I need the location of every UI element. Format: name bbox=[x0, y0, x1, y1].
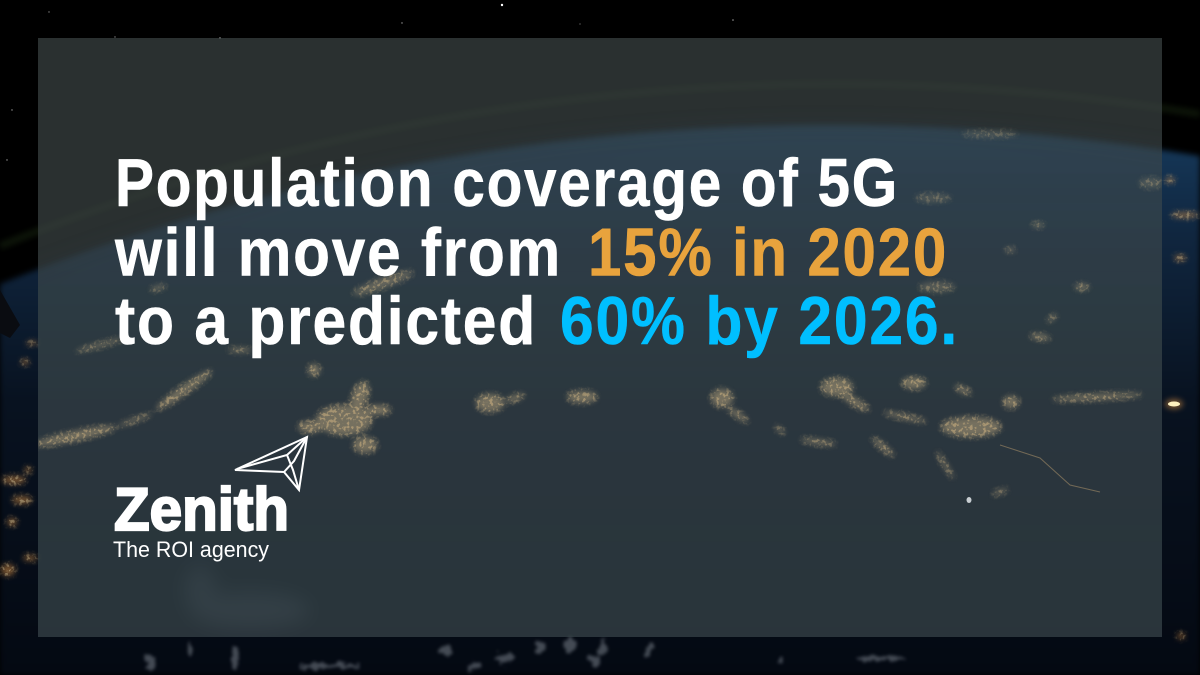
highlight: 15% in 2020: 15% in 2020 bbox=[588, 214, 948, 290]
line 2: will move from bbox=[114, 214, 562, 290]
tagline: The ROI agency bbox=[113, 537, 269, 562]
line 3: to a predicted bbox=[115, 283, 537, 359]
bright city at right edge bbox=[1165, 399, 1183, 409]
line 1: Population coverage of 5G bbox=[115, 145, 899, 221]
icon: paper plane bbox=[235, 437, 307, 490]
heading bbox=[114, 145, 959, 359]
city lights and clouds inside the panel bbox=[33, 131, 1163, 628]
highlight: 60% by 2026: 60% by 2026. bbox=[560, 283, 959, 359]
wordmark: Zenith bbox=[114, 476, 289, 543]
logo: Zenith bbox=[113, 437, 307, 562]
